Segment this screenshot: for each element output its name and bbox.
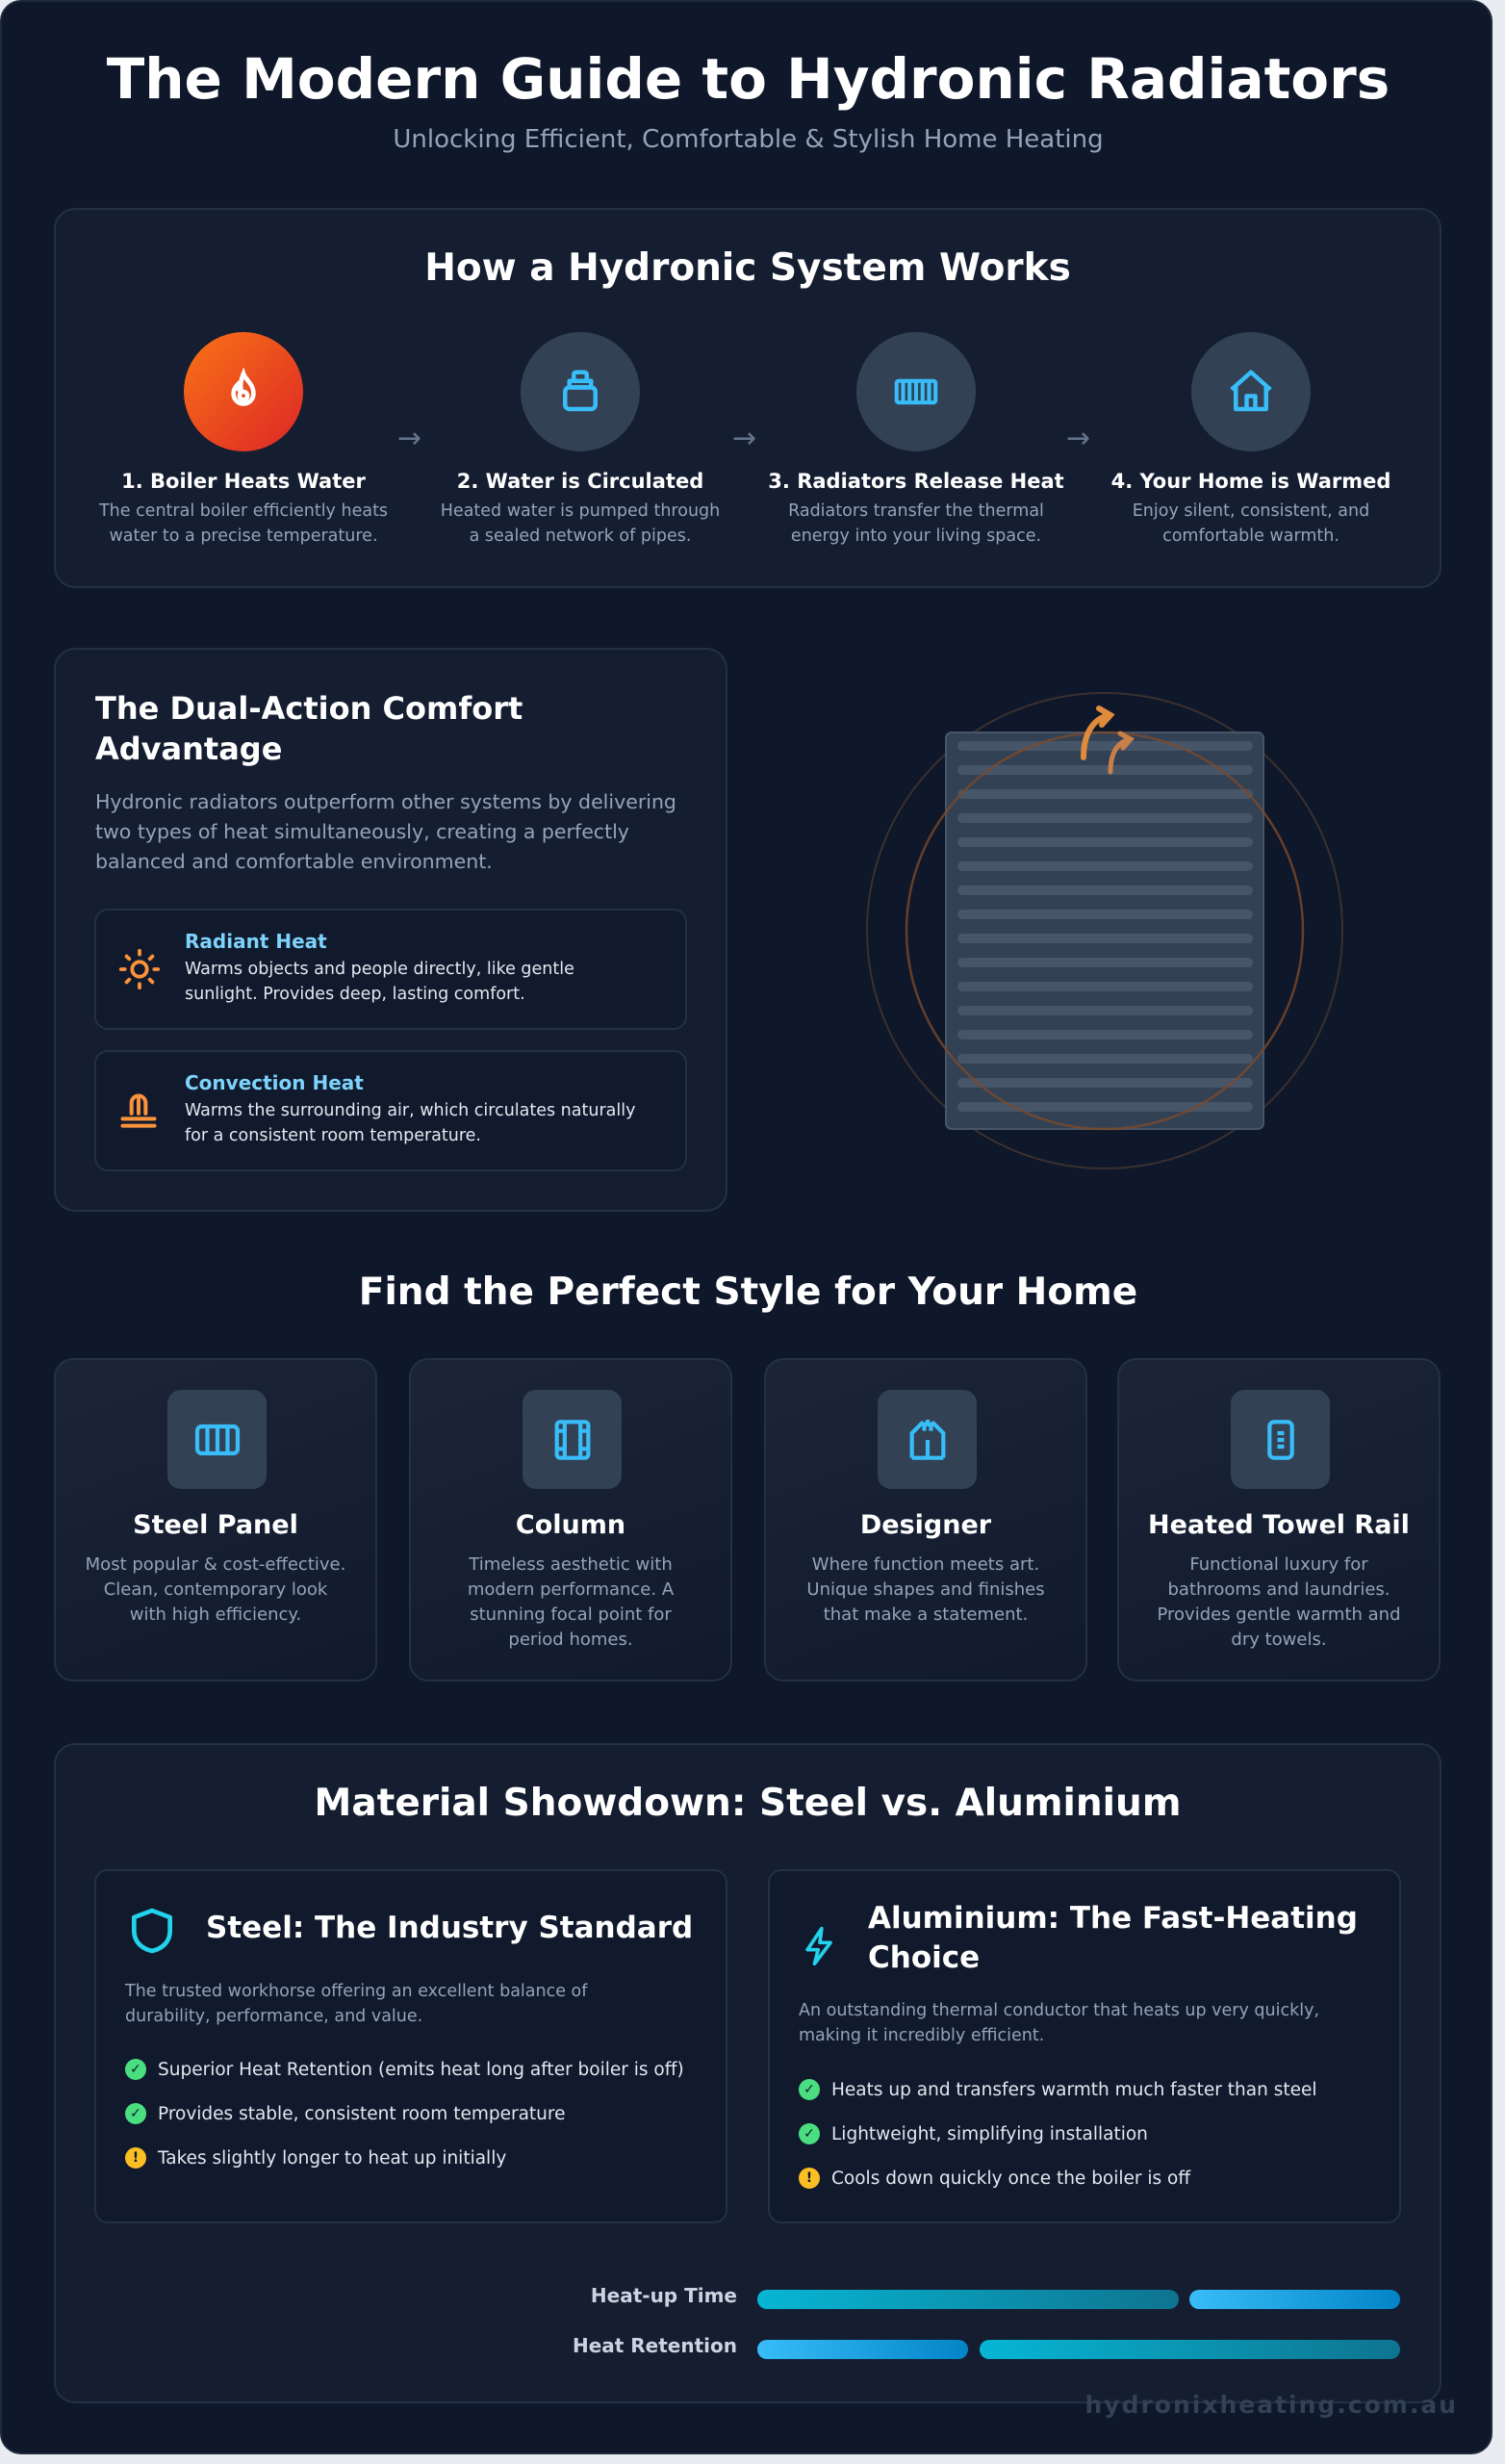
step 4 bbox=[1111, 332, 1390, 546]
steel bullets: ✓ bbox=[130, 2106, 141, 2121]
card: towel rail: Heated Towel Rail bbox=[1148, 1510, 1410, 1540]
icon: radiator bbox=[856, 332, 976, 451]
comparison bars: Heat Retention bbox=[573, 2334, 737, 2357]
card: aluminium bbox=[768, 1869, 1401, 2223]
step 3 text bbox=[768, 470, 1064, 546]
radiant text bbox=[185, 930, 574, 1004]
icon: lightning bbox=[805, 1927, 832, 1965]
step 1 bbox=[98, 332, 388, 546]
aluminium title: Aluminium: The Fast-Heating bbox=[868, 1901, 1358, 1936]
step 1 text: 1. Boiler Heats Water bbox=[121, 470, 366, 493]
heading: how it works: How a Hydronic System Works bbox=[424, 246, 1071, 290]
card: convection heat bbox=[94, 1050, 687, 1171]
icon: pump bbox=[521, 332, 640, 451]
watermark: hydronixheating.com.au bbox=[1084, 2391, 1458, 2419]
step 1 text bbox=[98, 470, 388, 546]
card: column: Timeless aesthetic with modern performance. A stunning focal point for period homes. bbox=[468, 1554, 674, 1650]
card: designer: Designer bbox=[860, 1510, 991, 1540]
heading: material: Material Showdown: Steel vs. Aluminium bbox=[315, 1782, 1181, 1825]
icon: designer bbox=[878, 1390, 977, 1489]
aluminium desc: An outstanding thermal conductor that heats up very quickly, making it incredibly efficient. bbox=[799, 2001, 1319, 2045]
aluminium bullets: ✓ bbox=[804, 2126, 815, 2142]
step 2 text: 2. Water is Circulated bbox=[457, 470, 703, 493]
step 3 text: 3. Radiators Release Heat bbox=[768, 470, 1064, 493]
icon: shield bbox=[132, 1908, 172, 1954]
card: designer bbox=[764, 1358, 1087, 1681]
panel: material showdown bbox=[54, 1743, 1441, 2403]
arrow 3: → bbox=[1066, 422, 1090, 455]
aluminium bullets bbox=[799, 2079, 1316, 2189]
convection text bbox=[185, 1071, 635, 1145]
steel title: Steel: The Industry Standard bbox=[206, 1911, 693, 1945]
panel: dual action bbox=[54, 648, 727, 1212]
step 3 text: Radiators transfer the thermal energy into your living space. bbox=[788, 501, 1044, 546]
heading: dual action: The Dual-Action Comfort bbox=[95, 690, 523, 727]
convection text: Warms the surrounding air, which circulates naturally for a consistent room temperature. bbox=[185, 1101, 635, 1145]
card: steel panel: Steel Panel bbox=[133, 1510, 298, 1540]
aluminium bullets: Lightweight, simplifying installation bbox=[831, 2123, 1148, 2144]
step 4 text bbox=[1111, 470, 1390, 546]
aluminium title: Choice bbox=[868, 1940, 980, 1975]
step 1 text: The central boiler efficiently heats water to a precise temperature. bbox=[99, 501, 388, 546]
icon: panel bbox=[167, 1390, 267, 1489]
icon: towel rail bbox=[1231, 1390, 1330, 1489]
radiant text: Radiant Heat bbox=[185, 930, 327, 953]
card: designer: Where function meets art. Unique shapes and finishes that make a statement. bbox=[806, 1554, 1045, 1625]
steel bullets: Provides stable, consistent room temperature bbox=[158, 2104, 566, 2123]
card: steel panel: Most popular & cost-effective. Clean, contemporary look with high efficiency. bbox=[86, 1554, 345, 1625]
card: steel bbox=[94, 1869, 727, 2223]
card: column bbox=[409, 1358, 732, 1681]
radiator illustration bbox=[866, 692, 1343, 1169]
comparison bars: Heat-up Time bbox=[591, 2284, 737, 2307]
steel desc: The trusted workhorse offering an excellent balance of durability, performance, and value. bbox=[125, 1982, 587, 2026]
heading: styles: Find the Perfect Style for Your Home bbox=[359, 1270, 1137, 1314]
card: towel rail bbox=[1117, 1358, 1441, 1681]
icon: flame bbox=[184, 332, 303, 451]
title: The Modern Guide to Hydronic Radiators bbox=[107, 46, 1390, 112]
radiant text: Warms objects and people directly, like gentle sunlight. Provides deep, lasting comfort. bbox=[185, 960, 574, 1004]
card: column: Column bbox=[516, 1510, 625, 1540]
step 4 text: Enjoy silent, consistent, and comfortable warmth. bbox=[1133, 501, 1369, 546]
comparison bars bbox=[573, 2284, 1400, 2359]
convection text: Convection Heat bbox=[185, 1071, 364, 1094]
arrow 1: → bbox=[397, 422, 421, 455]
steel bullets: Takes slightly longer to heat up initially bbox=[158, 2148, 506, 2168]
heading: dual action bbox=[95, 690, 523, 767]
step 4 text: 4. Your Home is Warmed bbox=[1111, 470, 1390, 493]
intro text: Hydronic radiators outperform other systems by delivering two types of heat simultaneously, creating a perfectly balanced and comfortable environment. bbox=[95, 790, 676, 873]
card: radiant heat bbox=[94, 909, 687, 1030]
icon: column bbox=[523, 1390, 622, 1489]
aluminium bullets: Cools down quickly once the boiler is off bbox=[831, 2168, 1190, 2189]
aluminium bullets: ! bbox=[806, 2170, 812, 2186]
icon: house bbox=[1191, 332, 1311, 451]
steel bullets: ! bbox=[133, 2150, 139, 2166]
card: steel panel bbox=[54, 1358, 377, 1681]
heading: dual action: Advantage bbox=[95, 731, 282, 767]
arrow 2: → bbox=[732, 422, 756, 455]
step 2 text: Heated water is pumped through a sealed network of pipes. bbox=[441, 501, 720, 546]
steel bullets: Superior Heat Retention (emits heat long after boiler is off) bbox=[158, 2060, 684, 2079]
aluminium bullets: Heats up and transfers warmth much faster than steel bbox=[831, 2079, 1316, 2100]
aluminium bullets: ✓ bbox=[804, 2082, 815, 2097]
step 3 bbox=[768, 332, 1064, 546]
card: towel rail: Functional luxury for bathrooms and laundries. Provides gentle warmth and dry towels. bbox=[1157, 1554, 1401, 1650]
subtitle: Unlocking Efficient, Comfortable & Stylish Home Heating bbox=[393, 125, 1104, 154]
aluminium title bbox=[868, 1901, 1358, 1975]
icon: convection bbox=[121, 1093, 156, 1128]
step 2 bbox=[441, 332, 720, 546]
steel bullets bbox=[125, 2059, 684, 2169]
steel bullets: ✓ bbox=[130, 2062, 141, 2077]
icon: sun bbox=[119, 949, 160, 989]
panel: how it works bbox=[54, 208, 1441, 588]
step 2 text bbox=[441, 470, 720, 546]
